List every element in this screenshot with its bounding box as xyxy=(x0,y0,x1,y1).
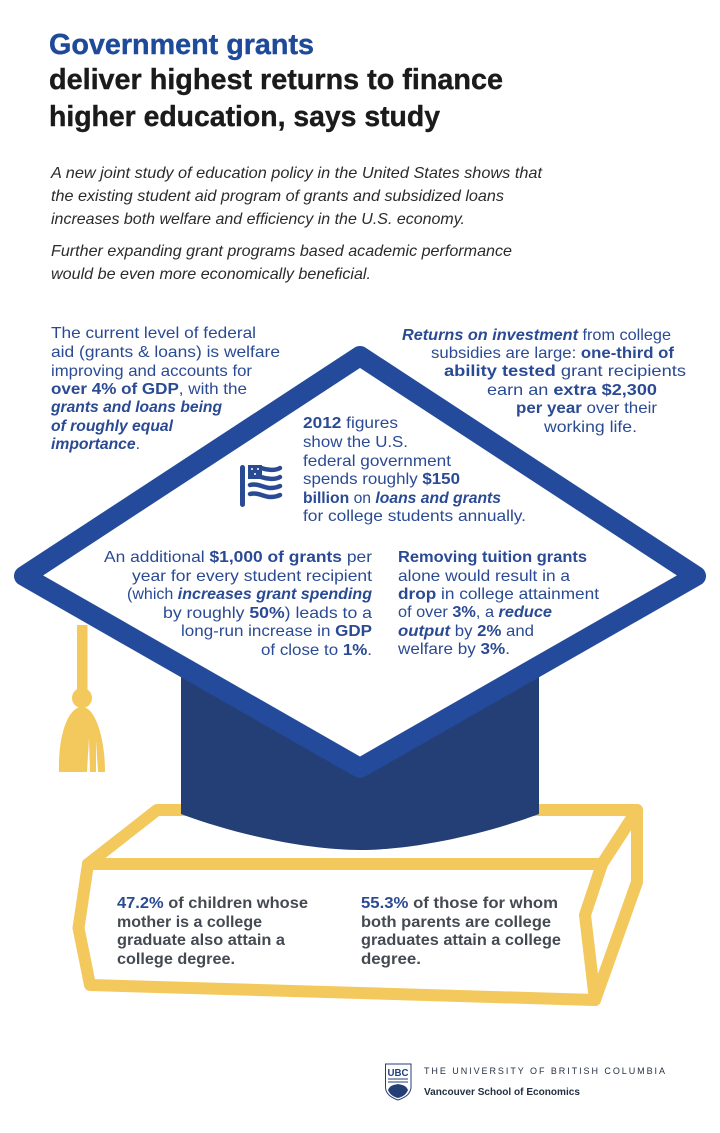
book text: mother college graduate: 47.2% of children whose xyxy=(117,895,308,912)
intro text: increases both welfare and efficiency in the U.S. economy. xyxy=(51,211,465,228)
book text: both parents college graduates: 55.3% of those for whom xyxy=(361,895,558,912)
text: additional grants: by roughly 50%) leads to a xyxy=(163,605,372,622)
book text: both parents college graduates: graduates attain a college xyxy=(361,932,561,949)
intro text: the existing student aid program of grants and subsidized loans xyxy=(51,188,504,205)
text: removing tuition grants: of over 3%, a reduce xyxy=(398,604,552,621)
book text: mother college graduate xyxy=(117,895,308,968)
intro text: A new joint study of education policy in the United States shows that xyxy=(50,165,543,182)
text: 2012 figures: spends roughly $150 xyxy=(303,471,460,488)
icon: US flag xyxy=(240,465,280,507)
UBC wordmark xyxy=(424,1066,665,1098)
text: additional grants: long-run increase in GDP xyxy=(181,623,372,640)
text: returns on investment xyxy=(402,327,686,436)
book text: both parents college graduates: degree. xyxy=(361,951,421,968)
title: higher education, says study xyxy=(49,101,440,133)
tassel xyxy=(59,625,105,772)
text: removing tuition grants: Removing tuition grants xyxy=(398,549,587,566)
text: federal aid share of GDP: The current level of federal xyxy=(51,325,256,342)
text: federal aid share of GDP: improving and accounts for xyxy=(51,363,253,380)
text: returns on investment: earn an extra $2,300 xyxy=(487,382,657,399)
text: removing tuition grants xyxy=(397,549,600,658)
text: 2012 figures: for college students annually. xyxy=(303,508,526,525)
UBC logo xyxy=(386,1064,411,1100)
UBC wordmark: Vancouver School of Economics xyxy=(424,1086,580,1098)
title xyxy=(49,29,503,133)
book outline xyxy=(78,810,637,1000)
title: Government grants xyxy=(49,29,314,61)
text: removing tuition grants: output by 2% and xyxy=(398,623,534,640)
mortarboard diamond xyxy=(24,356,696,768)
cap base xyxy=(181,670,539,850)
book text: both parents college graduates: both parents are college xyxy=(361,914,551,931)
text: additional grants: year for every student recipient xyxy=(132,568,373,585)
text: federal aid share of GDP: over 4% of GDP , with the xyxy=(51,381,247,398)
text: removing tuition grants: welfare by 3%. xyxy=(397,641,510,658)
text: returns on investment: ability tested grant recipients xyxy=(444,363,686,380)
text: additional grants: of close to 1%. xyxy=(261,642,372,659)
text: 2012 figures xyxy=(303,415,526,525)
text: federal aid share of GDP: aid (grants & loans) is welfare xyxy=(51,344,280,361)
text: additional grants: An additional $1,000 of grants per xyxy=(104,549,373,566)
text: removing tuition grants: drop in college attainment xyxy=(398,586,600,603)
book text: mother college graduate: college degree. xyxy=(117,951,235,968)
text: federal aid share of GDP: of roughly equal xyxy=(51,418,174,435)
intro text: Further expanding grant programs based academic performance xyxy=(51,243,512,260)
text: additional grants: (which increases grant spending xyxy=(127,586,372,603)
text: returns on investment: subsidies are large: one-third of xyxy=(431,345,675,362)
text: returns on investment: per year over their xyxy=(516,400,658,417)
text: federal aid share of GDP: importance. xyxy=(51,436,140,453)
text: federal aid share of GDP: grants and loans being xyxy=(50,399,222,416)
text: returns on investment: working life. xyxy=(543,419,637,436)
UBC wordmark: THE UNIVERSITY OF BRITISH COLUMBIA xyxy=(424,1066,665,1076)
text: 2012 figures: 2012 figures xyxy=(303,415,398,432)
title: deliver highest returns to finance xyxy=(49,64,503,96)
book text: mother college graduate: graduate also attain a xyxy=(117,932,285,949)
text: federal aid share of GDP xyxy=(50,325,280,453)
book text: both parents college graduates xyxy=(361,895,561,968)
intro text: would be even more economically beneficial. xyxy=(51,266,371,283)
text: 2012 figures: billion on loans and grants xyxy=(303,490,501,507)
text: 2012 figures: show the U.S. xyxy=(303,434,408,451)
text: removing tuition grants: alone would result in a xyxy=(398,568,570,585)
intro text xyxy=(50,165,543,283)
book text: mother college graduate: mother is a college xyxy=(117,914,262,931)
text: additional grants xyxy=(104,549,373,659)
text: returns on investment: Returns on investment from college xyxy=(402,327,671,344)
UBC logo: UBC xyxy=(388,1068,408,1079)
text: 2012 figures: federal government xyxy=(303,453,452,470)
